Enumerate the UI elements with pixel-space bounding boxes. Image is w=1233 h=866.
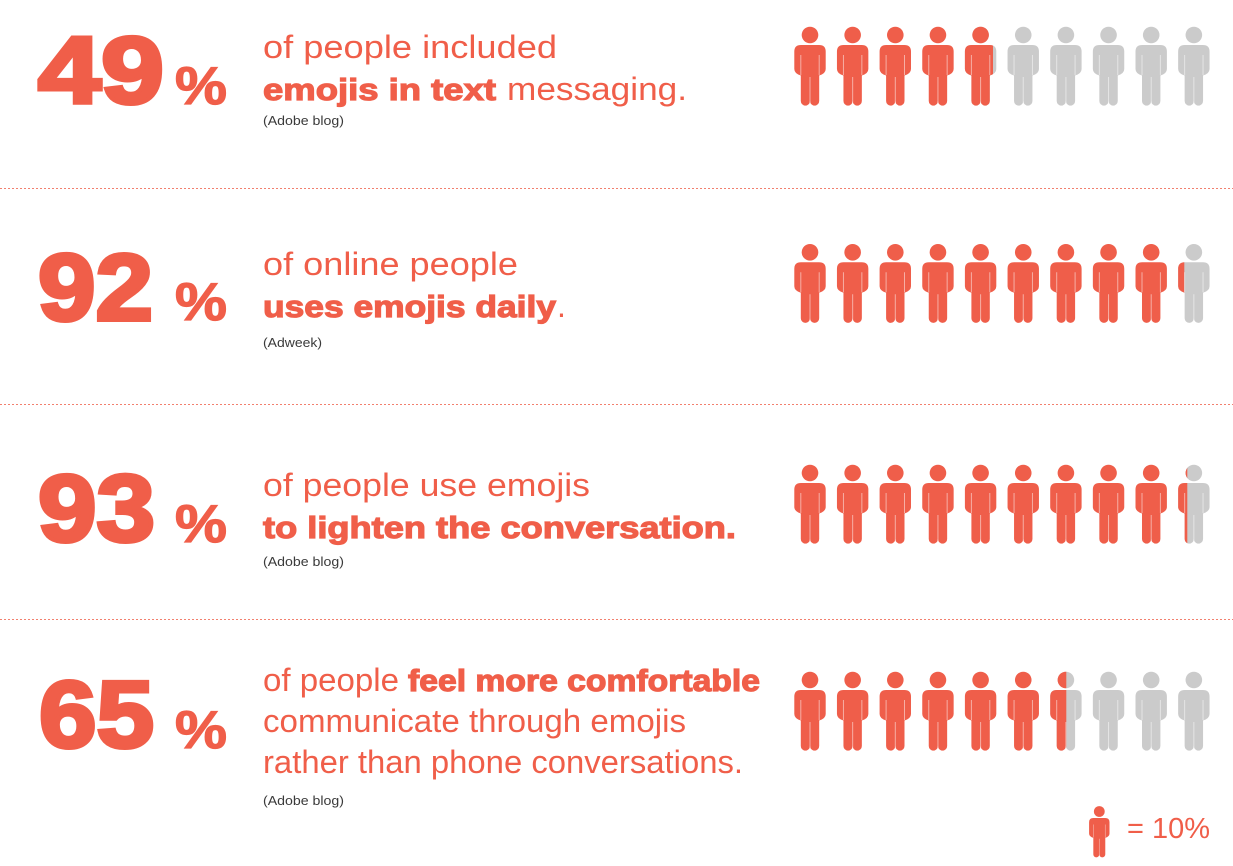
big number 92: 92 — [38, 235, 153, 341]
statement text — [263, 29, 687, 107]
big number 93: 93 — [38, 456, 155, 562]
statement text: of people included — [263, 29, 557, 65]
panel: 92 percent statistic — [38, 235, 1210, 350]
legend: one person equals 10 percent — [1089, 806, 1210, 858]
statement text: . — [557, 288, 566, 324]
panel: 49 percent statistic — [38, 18, 1210, 128]
panel: 93 percent statistic — [38, 456, 1210, 569]
legend label: = 10% — [1127, 813, 1210, 845]
statement text: of online people — [263, 246, 518, 282]
percent sign: % — [175, 273, 227, 332]
statement text: to lighten the conversation. — [263, 510, 736, 545]
statement text — [263, 246, 566, 324]
statement text: rather than phone conversations. — [263, 744, 743, 780]
panel: 65 percent statistic — [39, 662, 1210, 808]
source: (Adobe blog) — [263, 793, 344, 808]
statement text: communicate through emojis — [263, 703, 686, 739]
percent sign: % — [175, 57, 227, 116]
statement text: feel more comfortable — [408, 663, 760, 698]
statement text: emojis in text — [263, 72, 496, 107]
statement text: messaging. — [507, 71, 687, 107]
big number 65: 65 — [39, 662, 154, 768]
statement text: of people — [263, 662, 399, 698]
statement text — [263, 467, 736, 545]
source: (Adobe blog) — [263, 113, 344, 128]
percent sign: % — [175, 701, 227, 760]
statement text: of people use emojis — [263, 467, 590, 503]
source: (Adweek) — [263, 335, 322, 350]
percent sign: % — [175, 495, 227, 554]
big number 49: 49 — [38, 18, 164, 124]
statement text — [263, 662, 760, 780]
source: (Adobe blog) — [263, 554, 344, 569]
pictogram: 9.2 of 10 people — [794, 244, 1210, 323]
icon: legend person — [1089, 806, 1110, 858]
pictogram: 4.9 of 10 people — [794, 27, 1210, 106]
statement text: uses emojis daily — [263, 289, 557, 324]
pictogram: 6.5 of 10 people — [794, 672, 1210, 751]
pictogram: 9.3 of 10 people — [794, 465, 1210, 544]
